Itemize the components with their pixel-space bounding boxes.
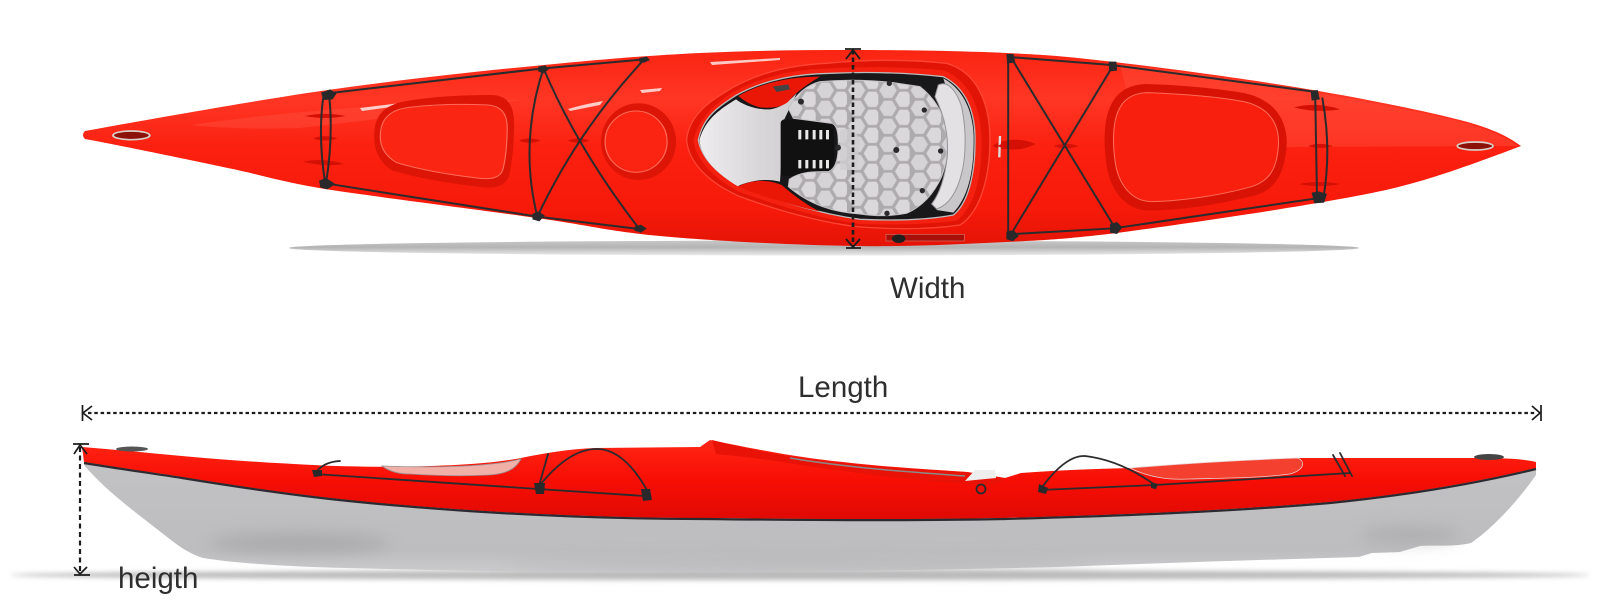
top view kayak [83, 50, 1521, 246]
chrome deck clip [993, 140, 1033, 149]
backrest [932, 84, 965, 209]
bow deck line dimples [303, 114, 590, 165]
top hull outline [83, 50, 1521, 246]
day hatch [601, 103, 676, 180]
side slide rail [886, 234, 964, 241]
footwell [781, 119, 834, 176]
seat glimpse [965, 470, 996, 481]
height label: heigth [118, 562, 198, 595]
stern upper light facet [1120, 64, 1518, 150]
cockpit [687, 60, 1033, 243]
seat bolts [798, 81, 943, 216]
front bungee ropes [319, 57, 650, 233]
bow light band [190, 100, 520, 129]
coaming opening [698, 73, 975, 220]
hatch side rear [1130, 458, 1303, 479]
ground shadow [10, 570, 1590, 580]
stern end details [997, 54, 1493, 241]
rear hatch [1105, 84, 1287, 211]
coaming inner shadow [790, 458, 965, 476]
honeycomb seat [788, 80, 947, 216]
cockpit rim [687, 60, 990, 229]
stern deck line dimples [997, 105, 1340, 186]
footwell slots [798, 130, 829, 168]
side bow handle [116, 446, 148, 452]
rear bungee ropes [1006, 54, 1327, 241]
side hull [84, 462, 1536, 572]
seat smooth centre [840, 129, 860, 170]
front hatch [374, 95, 514, 188]
red deck tongue upper [738, 77, 820, 108]
bow end details [113, 57, 676, 233]
red deck tongue lower [737, 181, 820, 212]
deck fitting near coaming [773, 84, 790, 92]
side view kayak [82, 440, 1536, 572]
length dimension arrow [82, 405, 1541, 421]
side deck [82, 440, 1536, 519]
cockpit coaming side [712, 440, 1005, 485]
length label: Length [798, 371, 888, 404]
hull shading [210, 527, 1460, 570]
height dimension arrow [73, 444, 90, 575]
bow grab handle [113, 131, 150, 140]
width label: Width [890, 272, 965, 305]
hatch side front [382, 459, 521, 476]
sheer line [84, 463, 1536, 520]
stern grab handle [1457, 142, 1493, 150]
inner rim light band [693, 67, 982, 225]
side stern handle [1474, 454, 1504, 460]
rear coaming light band [937, 78, 974, 213]
top view shadow [289, 240, 1359, 256]
deck eyelet [976, 484, 986, 494]
deck gloss streaks [360, 58, 780, 111]
width dimension arrow [845, 49, 861, 248]
side bungee ropes [312, 449, 1352, 501]
front deck interior [699, 93, 797, 186]
